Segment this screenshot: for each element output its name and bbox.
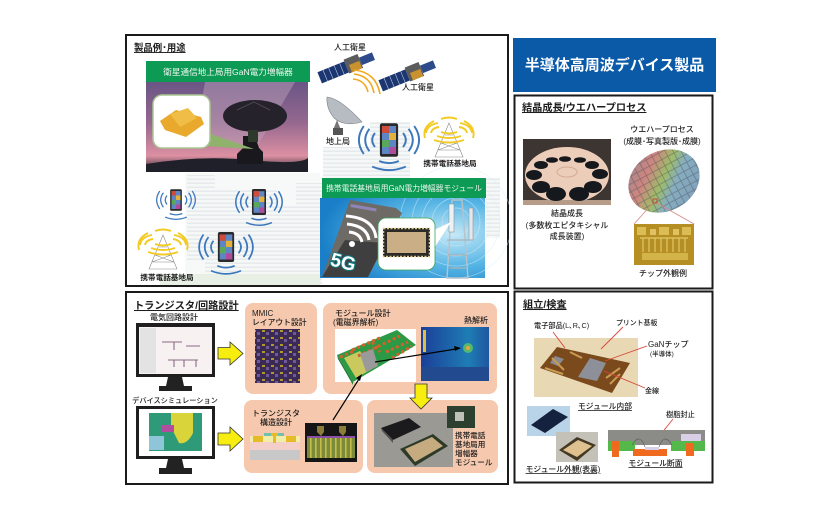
image: transistor layout (305, 423, 357, 462)
leader arrows: parts (553, 327, 647, 388)
image: module inset (447, 406, 475, 428)
icon: wifi (346, 216, 376, 242)
label: GaN chip: GaNチップ (648, 340, 688, 349)
icon: phone middle (236, 189, 282, 225)
heading: products: 製品例･用途 (134, 42, 186, 53)
icon: satellite 2 (378, 57, 437, 92)
label: module exterior: モジュール外観(表裏) (526, 464, 601, 474)
label: module text: 基地局用 (455, 439, 485, 449)
arrow: yellow down (410, 384, 432, 409)
image: chip (634, 224, 694, 265)
image: module back (556, 432, 598, 462)
icon: parabolic dish (223, 100, 287, 164)
callout: amplifier chip (153, 95, 254, 149)
image: module interior (534, 338, 638, 397)
label: satellite 2: 人工衛星 (402, 82, 434, 92)
image: module front (527, 406, 570, 436)
icon: monitor simulation (136, 406, 215, 474)
label: structure design: 構造設計 (260, 417, 292, 427)
panel: module design (323, 303, 497, 394)
label: crystal growth: (多数枚エピタキシャル (526, 220, 608, 230)
callout lines: chip zoom (634, 199, 694, 224)
panel: assembly and inspection (514, 292, 712, 482)
callout: module chip (378, 218, 451, 270)
icon: orange signal arcs (353, 70, 380, 94)
label: base station bottom left: 携帯電話基地局 (140, 272, 194, 282)
label: module interior: モジュール内部 (578, 401, 632, 411)
label: gold wire: 金線 (645, 386, 659, 395)
heading: assembly: 組立/検査 (523, 298, 567, 311)
label: satellite 1: 人工衛星 (334, 42, 366, 52)
banner: module amplifier (322, 178, 486, 198)
image: module photo (374, 413, 453, 467)
label: GaN chip (648, 340, 688, 358)
label: crystal growth: 結晶成長 (551, 208, 583, 218)
icon: phone left (157, 189, 195, 219)
panel: products and applications (126, 35, 512, 286)
label: layout design: レイアウト設計 (252, 317, 307, 327)
icon: antenna tower (447, 200, 473, 278)
image: epitaxy reactor (523, 139, 611, 205)
label: resin sealing: 樹脂封止 (666, 410, 695, 419)
banner: main title (513, 38, 716, 92)
image: 5G module (320, 166, 512, 278)
image: PCB model (335, 329, 416, 385)
icon: base station top right (424, 118, 474, 157)
panel: crystal growth and wafer process (514, 96, 712, 288)
banner: module amplifier: 携帯電話基地局用GaN電力増幅器モジュール (326, 183, 482, 193)
arrow: black from transistor (333, 374, 362, 420)
label: chip: チップ外観例 (639, 268, 687, 278)
panel: transistor and circuit design (126, 292, 508, 484)
image: cross section (250, 433, 300, 460)
banner: main title: 半導体高周波デバイス製品 (525, 56, 704, 74)
icon: smartphone (322, 200, 402, 277)
leader arrow: resin (661, 419, 673, 434)
heading: transistor design: トランジスタ/回路設計 (134, 299, 239, 312)
panel: module product (367, 400, 498, 473)
label: MMIC: MMIC (252, 309, 274, 318)
photo: satellite ground station (146, 82, 308, 172)
heading: crystal growth: 結晶成長/ウエハープロセス (522, 101, 646, 114)
label: crystal growth (526, 208, 608, 241)
label: ground station: 地上局 (326, 136, 350, 146)
label: GaN chip: (半導体) (650, 349, 674, 358)
panel: transistor structure (244, 400, 363, 473)
label: transistor: トランジスタ (252, 409, 300, 418)
label: module text (455, 430, 493, 467)
image: thermal map (421, 327, 489, 381)
label: electronic parts: 電子部品(L､R､C) (534, 321, 589, 330)
label: module text: モジュール (455, 458, 493, 467)
label: wafer process: ウエハープロセス (630, 125, 694, 134)
icon: base station bottom left (138, 230, 188, 269)
panel: MMIC layout (245, 303, 317, 394)
arrow: upper yellow (218, 342, 243, 365)
icon: ground dish (327, 97, 362, 135)
label: wafer process (623, 125, 701, 146)
arrow: lower yellow (218, 427, 243, 451)
text: 5G: 5G (328, 250, 358, 276)
image: MMIC layout (255, 329, 300, 383)
label: module text: 携帯電話 (455, 430, 486, 440)
label: module design: モジュール設計 (335, 308, 390, 318)
city buildings background (160, 122, 500, 285)
diagram: module cross section (608, 430, 705, 457)
label: wafer process: (成膜･写真製版･成膜) (623, 136, 701, 146)
banner: satellite amplifier: 衛星通信地上局用GaN電力増幅器 (163, 66, 293, 77)
banner: satellite amplifier (146, 61, 310, 82)
label: thermal analysis: 熱解析 (464, 315, 488, 325)
label: crystal growth: 成長装置) (550, 231, 585, 241)
icon: monitor circuit (136, 323, 215, 391)
icon: satellite 1 (317, 49, 376, 84)
label: printed board: プリント基板 (616, 318, 657, 327)
image: wafer (617, 137, 711, 225)
label: module cross section: モジュール断面 (628, 458, 683, 468)
label: base station top right: 携帯電話基地局 (423, 158, 477, 168)
arrow: black to thermal (375, 346, 461, 362)
label: circuit design: 電気回路設計 (150, 312, 198, 322)
icon: phone top right (359, 123, 419, 170)
label: device simulation: デバイスシミュレーション (132, 396, 218, 405)
label: module text: 増幅器 (455, 448, 478, 458)
icon: phone lower (199, 232, 253, 274)
label: EM analysis: (電磁界解析) (333, 317, 379, 327)
